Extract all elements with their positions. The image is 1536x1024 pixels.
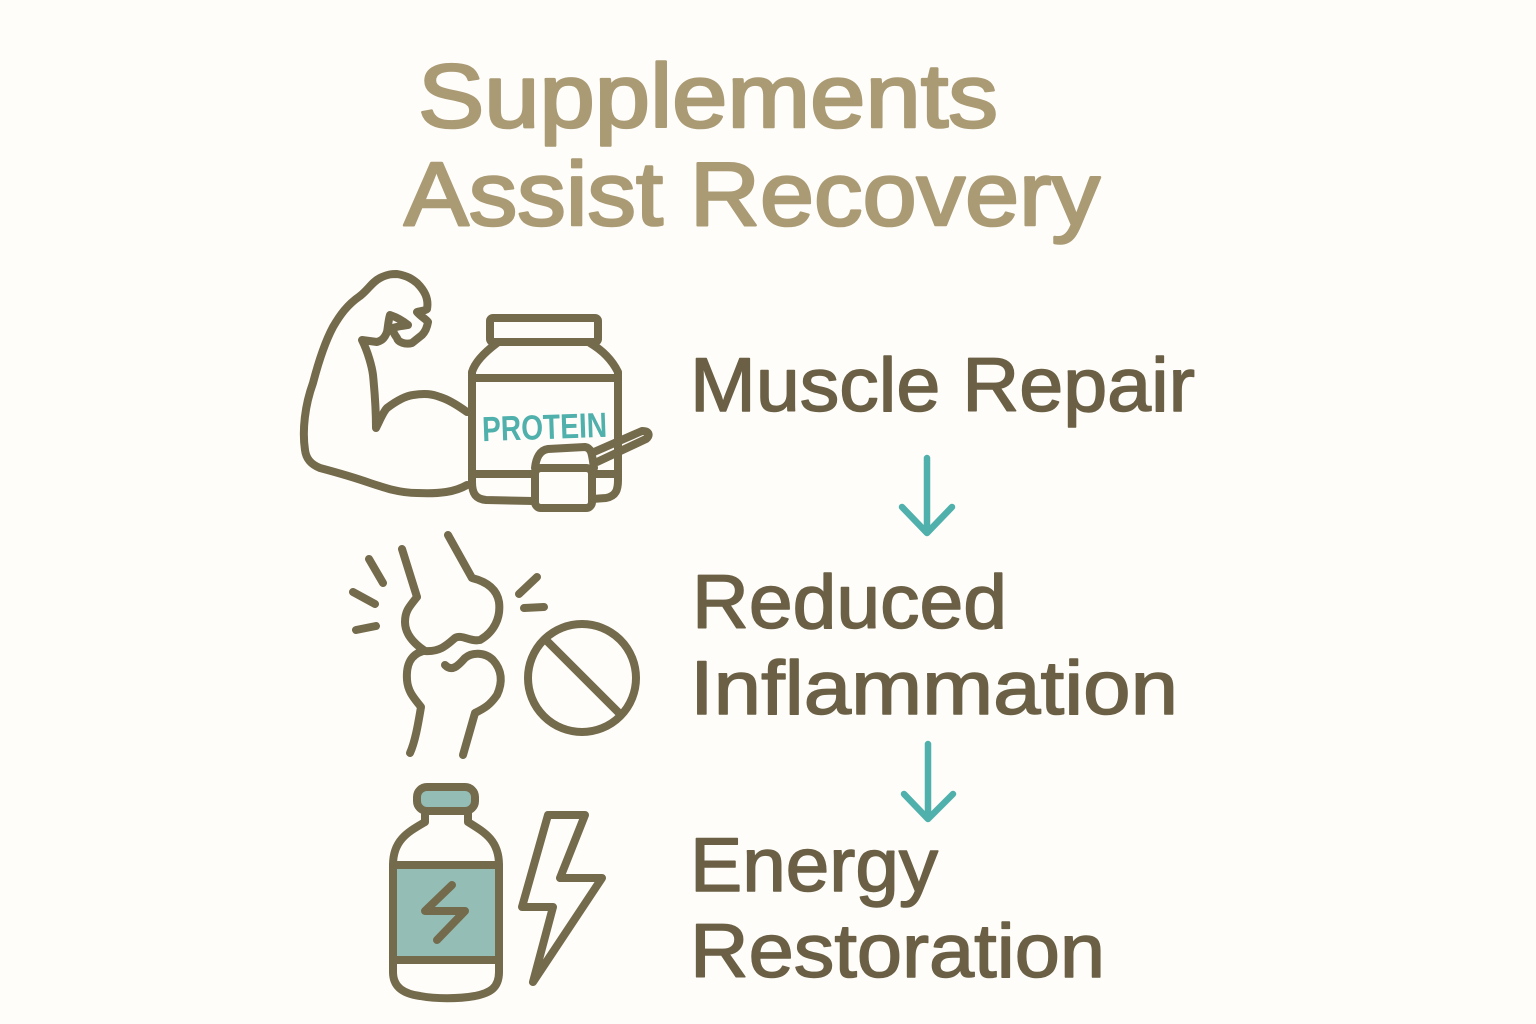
icon: lightning bolt — [522, 815, 602, 982]
label: Reduced Inflammation: Reduced — [692, 560, 1007, 645]
title: Supplements — [418, 47, 998, 147]
arrow: reduced inflammation to energy restoration — [904, 744, 953, 819]
icon: flexed arm — [304, 274, 467, 493]
title: Assist Recovery — [404, 145, 1100, 245]
label: Energy Restoration: Restoration — [690, 909, 1105, 994]
label: Energy Restoration: Energy — [690, 823, 938, 908]
icon: scoop — [535, 431, 649, 508]
icon: flexed arm with protein jar — [304, 274, 649, 508]
title — [404, 47, 1100, 245]
label: Energy Restoration — [690, 823, 1105, 994]
icon: knee joint — [402, 535, 501, 755]
icon: energy bottle with lightning bolt — [393, 787, 602, 998]
label: Reduced Inflammation: Inflammation — [690, 646, 1178, 731]
icon: protein jar — [472, 318, 618, 501]
label: Muscle Repair: Muscle Repair — [690, 343, 1195, 428]
icon: prohibition sign — [528, 624, 636, 732]
arrow: muscle repair to reduced inflammation — [902, 458, 952, 533]
label: Reduced Inflammation — [690, 560, 1178, 731]
icon: pain lines — [353, 559, 544, 630]
icon: knee joint with pain lines and prohibition sign — [353, 535, 636, 755]
label: PROTEIN: PROTEIN — [481, 406, 608, 449]
icon: bottle — [393, 787, 499, 998]
